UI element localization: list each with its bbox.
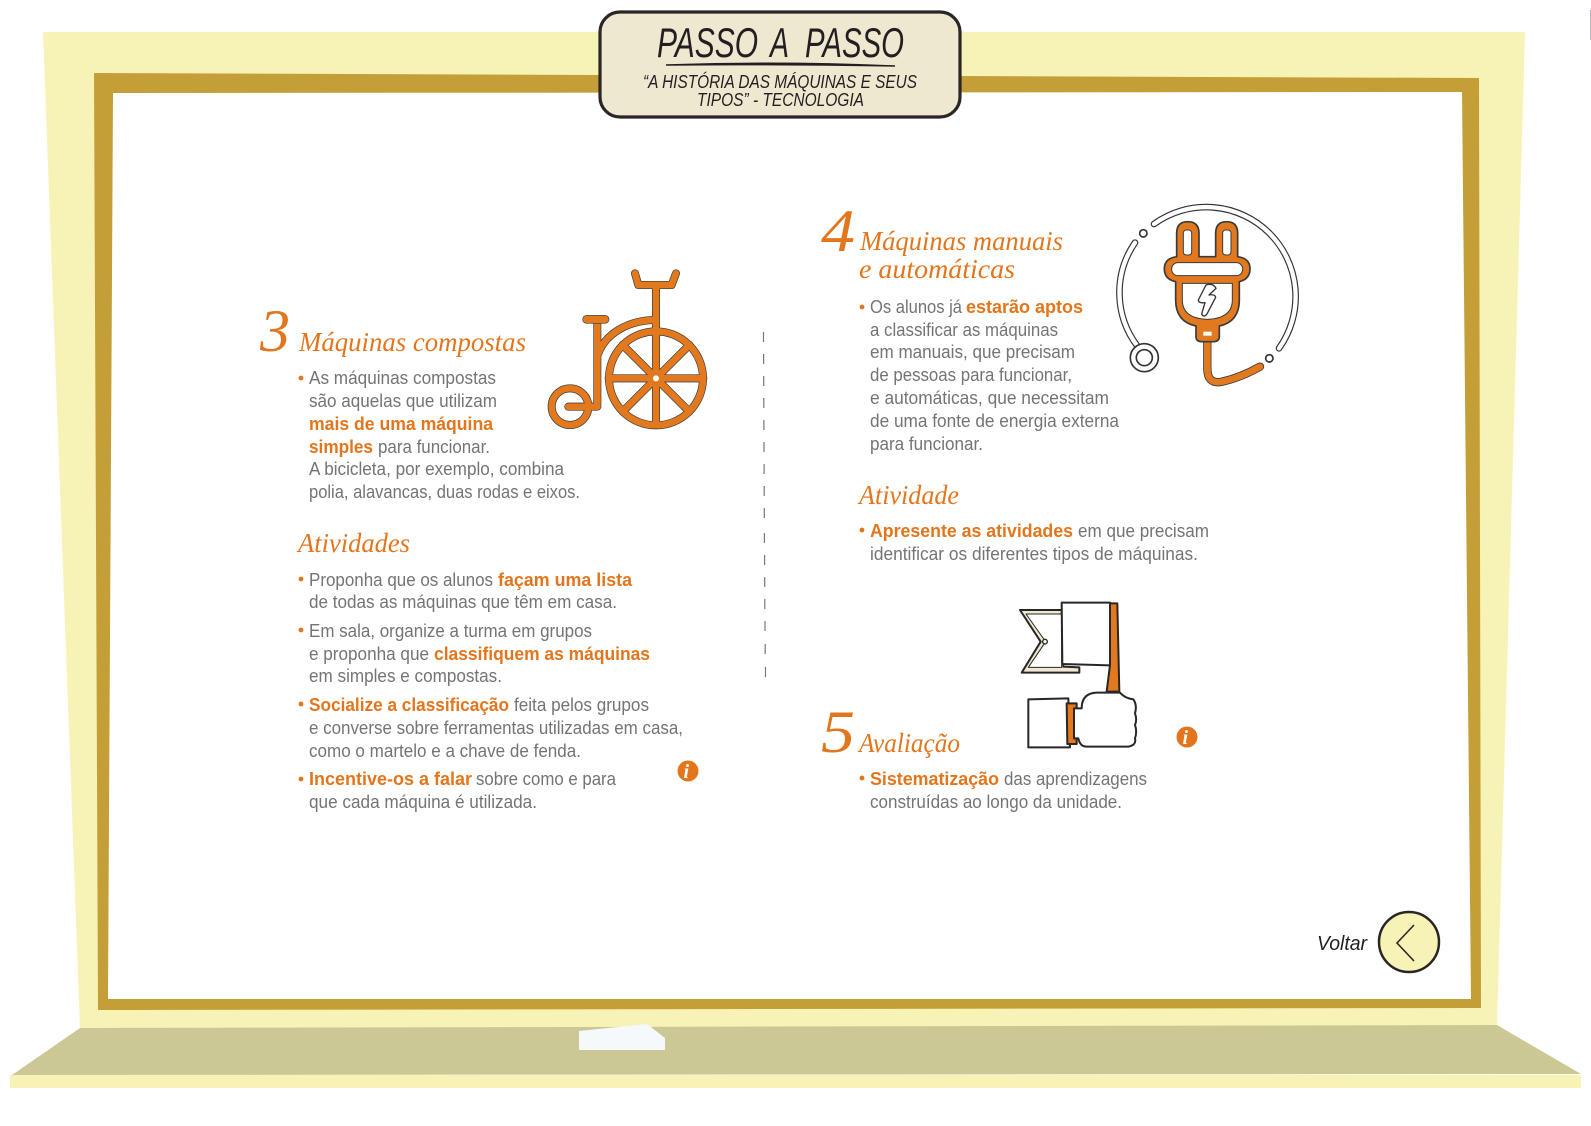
icon: info (678, 760, 698, 783)
list: atividades: façam uma lista (498, 570, 633, 590)
list: atividades: e converse sobre ferramentas utilizadas em casa, (309, 718, 683, 738)
number 5: 5 (821, 699, 855, 765)
title: A (768, 19, 789, 66)
text block: máquinas manuais e automáticas: de pessoas para funcionar, (870, 365, 1072, 385)
list: atividades: classifiquem as máquinas (434, 644, 650, 664)
list: atividades: em simples e compostas. (309, 666, 502, 686)
number 4: 4 (821, 198, 855, 264)
text block: máquinas manuais e automáticas: Os alunos já (870, 297, 963, 317)
title (657, 19, 904, 66)
icon: high-wheel bicycle (552, 273, 703, 425)
subtitle (643, 71, 917, 110)
icon: info: i (1182, 727, 1188, 749)
heading: máquinas manuais e automáticas: Máquinas manuais (859, 226, 1063, 256)
text block: avaliação: Sistematização (870, 769, 999, 789)
subtitle: TIPOS” - TECNOLOGIA (697, 90, 864, 110)
title underline (666, 63, 895, 66)
icon: back arrow (1379, 912, 1439, 972)
text block: definition: A bicicleta, por exemplo, combina (309, 459, 565, 479)
list: atividades (299, 570, 683, 812)
text block: definition: simples (309, 437, 373, 457)
text block: avaliação: das aprendizagens (1004, 769, 1147, 789)
text block: avaliação (860, 769, 1147, 812)
chalk tray (10, 1025, 1581, 1088)
text block: máquinas manuais e automáticas: de uma fonte de energia externa (870, 411, 1120, 431)
text block: máquinas manuais e automáticas: e automáticas, que necessitam (870, 388, 1109, 408)
title: PASSO (805, 19, 904, 66)
heading: atividades: Atividades (296, 528, 410, 558)
list: atividades: que cada máquina é utilizada. (309, 792, 537, 812)
list: atividades: Proponha que os alunos (309, 570, 493, 590)
list: atividades: Em sala, organize a turma em grupos (309, 621, 592, 641)
icon: info: i (684, 761, 690, 783)
icon: info (1176, 726, 1198, 749)
list: atividades: Incentive-os a falar (309, 769, 472, 789)
text block: definition: polia, alavancas, duas rodas e eixos. (309, 482, 580, 502)
text block: máquinas manuais e automáticas (860, 297, 1120, 454)
list: atividades: sobre como e para (476, 769, 617, 789)
list: atividades: como o martelo e a chave de fenda. (309, 741, 581, 761)
icon: electric plug (1119, 207, 1296, 382)
text block: avaliação: construídas ao longo da unidade. (870, 792, 1122, 812)
list: atividade: em que precisam (1078, 521, 1209, 541)
list: atividade: Apresente as atividades (870, 521, 1073, 541)
section 3: máquinas compostas (259, 273, 703, 812)
heading: atividade: Atividade (857, 480, 959, 510)
section 5: avaliação (821, 603, 1198, 812)
title panel (600, 12, 960, 117)
list: atividades: feita pelos grupos (514, 695, 649, 715)
section 4: máquinas manuais e automáticas (821, 198, 1296, 564)
text block: máquinas manuais e automáticas: em manuais, que precisam (870, 342, 1075, 362)
label: voltar: Voltar (1317, 933, 1368, 955)
list: atividades: de todas as máquinas que têm em casa. (309, 592, 617, 612)
back button (1317, 912, 1439, 972)
text block: definition: para funcionar. (378, 437, 490, 457)
text block: definition: mais de uma máquina (309, 414, 494, 434)
list: atividades: Socialize a classificação (309, 695, 509, 715)
list: atividade (860, 521, 1209, 564)
heading: avaliação: Avaliação (857, 728, 960, 758)
chalk piece (579, 1024, 665, 1050)
heading: máquinas compostas: Máquinas compostas (298, 327, 526, 357)
text block: máquinas manuais e automáticas: para funcionar. (870, 434, 983, 454)
heading: máquinas manuais e automáticas (859, 226, 1063, 284)
heading: máquinas manuais e automáticas: e automáticas (859, 254, 1015, 284)
text block: definition (299, 368, 580, 502)
number 3: 3 (259, 298, 290, 364)
list: atividade: identificar os diferentes tipos de máquinas. (870, 544, 1198, 564)
icon: hand holding flag (1020, 603, 1136, 747)
title: PASSO (657, 19, 758, 66)
list: atividades: e proponha que (309, 644, 429, 664)
text block: máquinas manuais e automáticas: a classificar as máquinas (870, 320, 1058, 340)
text block: definition: são aquelas que utilizam (309, 391, 497, 411)
text block: máquinas manuais e automáticas: estarão aptos (966, 297, 1083, 317)
subtitle: “A HISTÓRIA DAS MÁQUINAS E SEUS (643, 71, 917, 92)
text block: definition: As máquinas compostas (309, 368, 496, 388)
